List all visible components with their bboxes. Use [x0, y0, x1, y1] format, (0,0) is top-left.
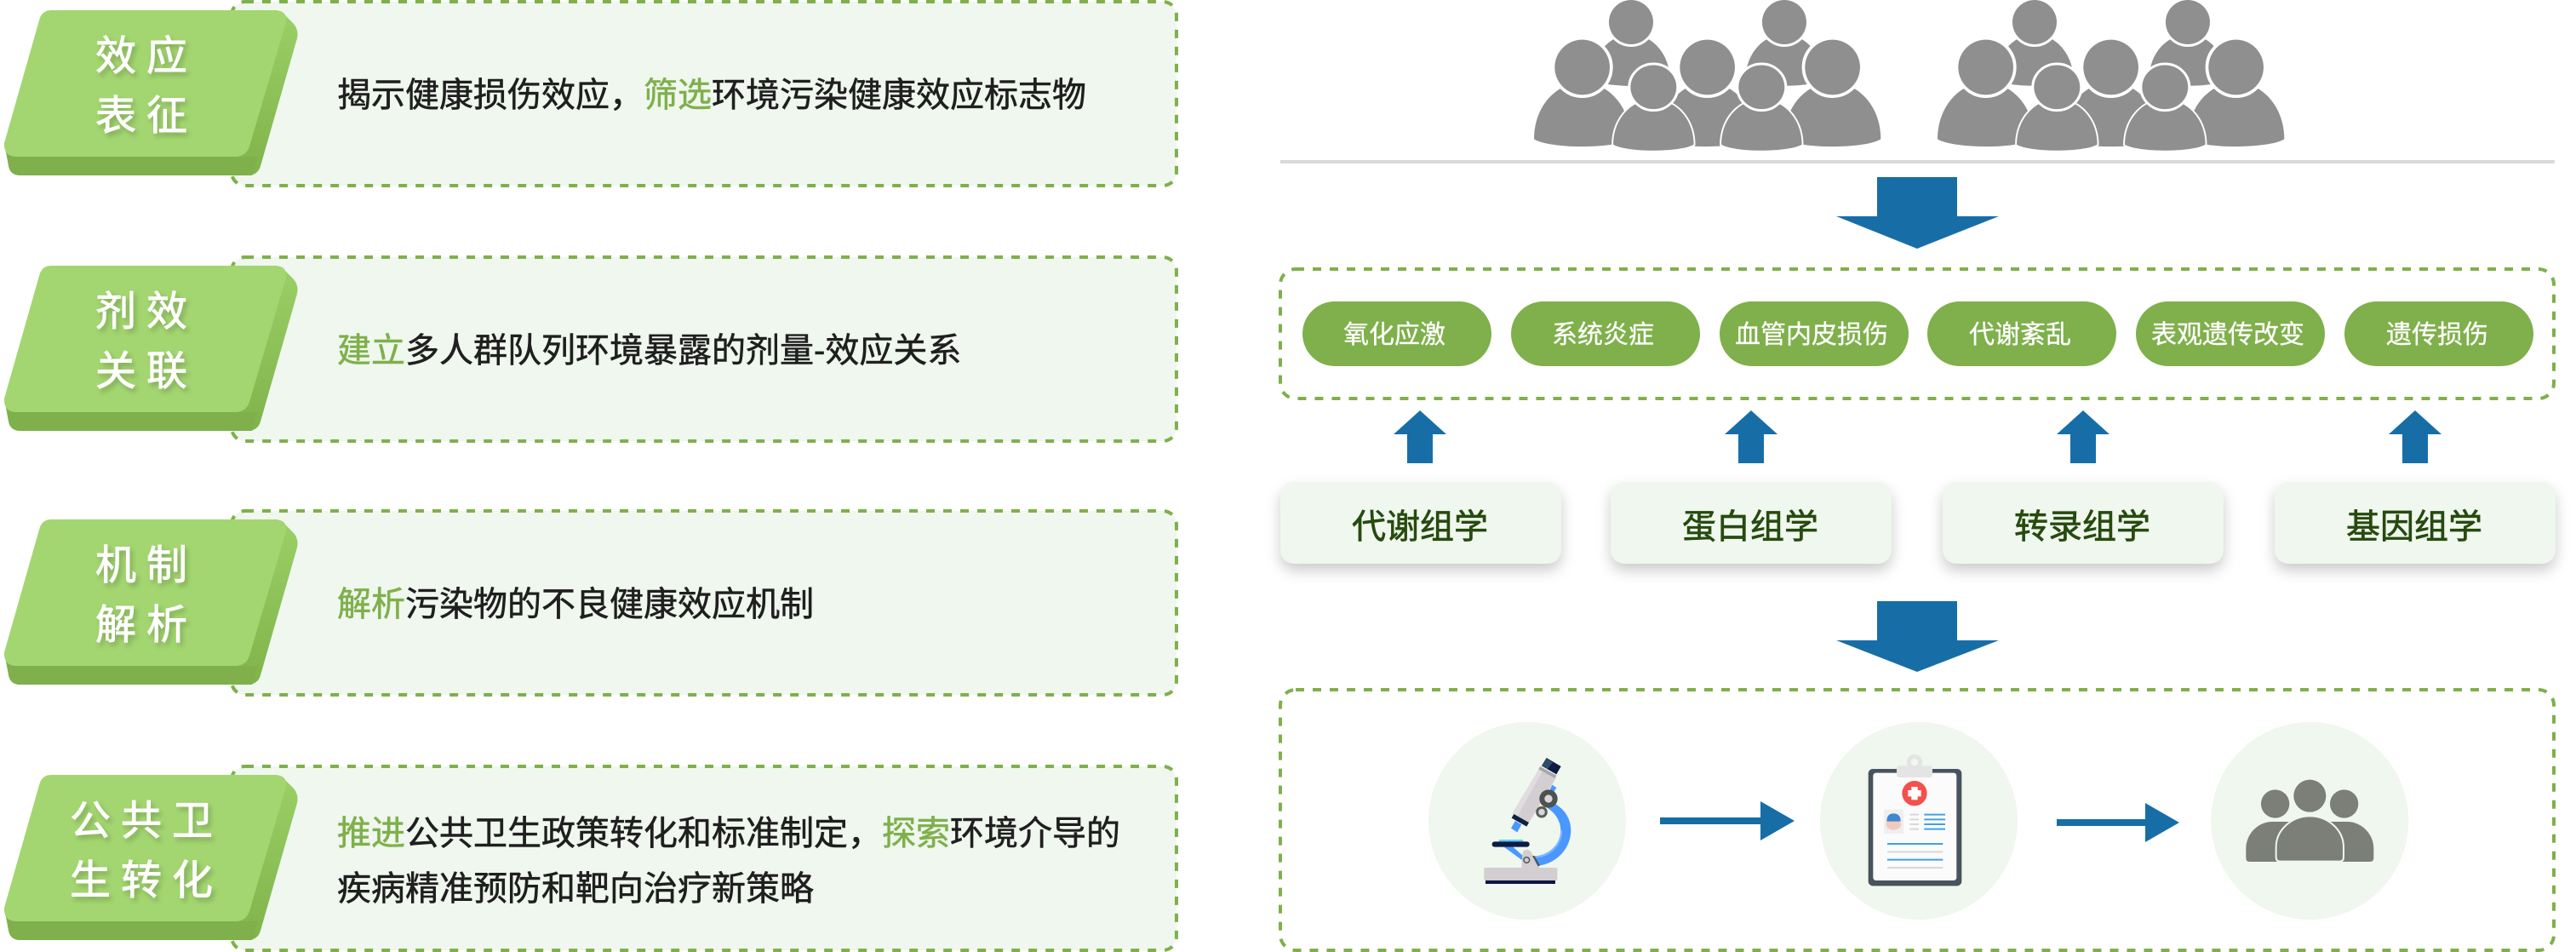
pill: 表观遗传改变: 表观遗传改变 [2151, 321, 2304, 349]
description text 4 [337, 815, 1120, 908]
badge label 3 [95, 543, 197, 648]
badge label 3: 解析 [95, 603, 197, 648]
description text 3: 解析污染物的不良健康效应机制 [337, 586, 814, 623]
panel: 机制解析 [4, 511, 1176, 695]
arrow: right 1 [1660, 801, 1795, 840]
box: 蛋白组学: 蛋白组学 [1682, 508, 1818, 546]
description panel 4 [232, 766, 1176, 950]
badge label 2 [95, 290, 197, 394]
box: 蛋白组学 [1611, 482, 1892, 564]
badge label 4 [70, 799, 223, 903]
box: 转录组学: 转录组学 [2014, 508, 2150, 546]
description panel 3 [232, 511, 1176, 695]
arrow: up 3 [2057, 410, 2109, 463]
badge label 1: 表征 [95, 94, 197, 139]
icon: crowd left [1534, 0, 1880, 151]
box: 转录组学 [1943, 482, 2224, 564]
pill: 遗传损伤 [2344, 301, 2533, 366]
badge label 4: 生转化 [70, 858, 223, 903]
pill: 血管内皮损伤 [1720, 301, 1909, 366]
description text 1: 揭示健康损伤效应，筛选环境污染健康效应标志物 [337, 77, 1086, 114]
pill: 系统炎症 [1511, 301, 1700, 366]
badge 4 [4, 775, 298, 940]
description panel 1 [232, 2, 1176, 186]
panel: 效应表征 [4, 2, 1176, 186]
badge 1 [4, 10, 298, 175]
arrow: crowd to effects [1836, 177, 1999, 249]
pill: 氧化应激 [1302, 301, 1491, 366]
panel: 公共卫生转化 [4, 766, 1176, 950]
icon: medical record clipboard [1820, 722, 2018, 920]
pill: 代谢紊乱: 代谢紊乱 [1969, 321, 2071, 349]
arrow: up 4 [2389, 410, 2441, 463]
box: 基因组学: 基因组学 [2346, 508, 2482, 546]
icon: microscope [1428, 722, 1626, 920]
badge label 1: 效应 [95, 34, 197, 79]
description text 4: 推进公共卫生政策转化和标准制定，探索环境介导的 [337, 815, 1120, 852]
icon: population group [2211, 722, 2408, 920]
box: 基因组学 [2275, 482, 2556, 564]
panel: health effects [1280, 269, 2554, 399]
pill: 血管内皮损伤: 血管内皮损伤 [1735, 321, 1888, 349]
panel: translation pathway [1280, 690, 2554, 950]
arrow: right 2 [2057, 803, 2179, 842]
description panel 2 [232, 257, 1176, 441]
badge label 3: 机制 [95, 543, 197, 588]
box: 代谢组学: 代谢组学 [1352, 508, 1488, 546]
pill: 表观遗传改变 [2136, 301, 2325, 366]
pill: 代谢紊乱 [1927, 301, 2116, 366]
description text 4: 疾病精准预防和靶向治疗新策略 [337, 870, 814, 908]
dashed frame [1280, 690, 2554, 950]
arrow: up 2 [1725, 410, 1777, 463]
badge 3 [4, 519, 298, 685]
panel: 剂效关联 [4, 257, 1176, 441]
badge label 4: 公共卫 [70, 799, 223, 844]
badge label 1 [95, 34, 197, 139]
pill: 系统炎症: 系统炎症 [1552, 321, 1654, 349]
dashed frame [1280, 269, 2554, 399]
pill: 氧化应激: 氧化应激 [1343, 321, 1445, 349]
badge 2 [4, 266, 298, 431]
icon: crowd right [1938, 0, 2284, 151]
badge label 2: 关联 [95, 349, 197, 394]
description text 2: 建立多人群队列环境暴露的剂量-效应关系 [337, 332, 961, 370]
arrow: omics to translation [1836, 601, 1999, 672]
arrow: up 1 [1394, 410, 1446, 463]
box: 代谢组学 [1280, 482, 1561, 564]
badge label 2: 剂效 [95, 290, 197, 335]
pill: 遗传损伤: 遗传损伤 [2386, 321, 2488, 349]
